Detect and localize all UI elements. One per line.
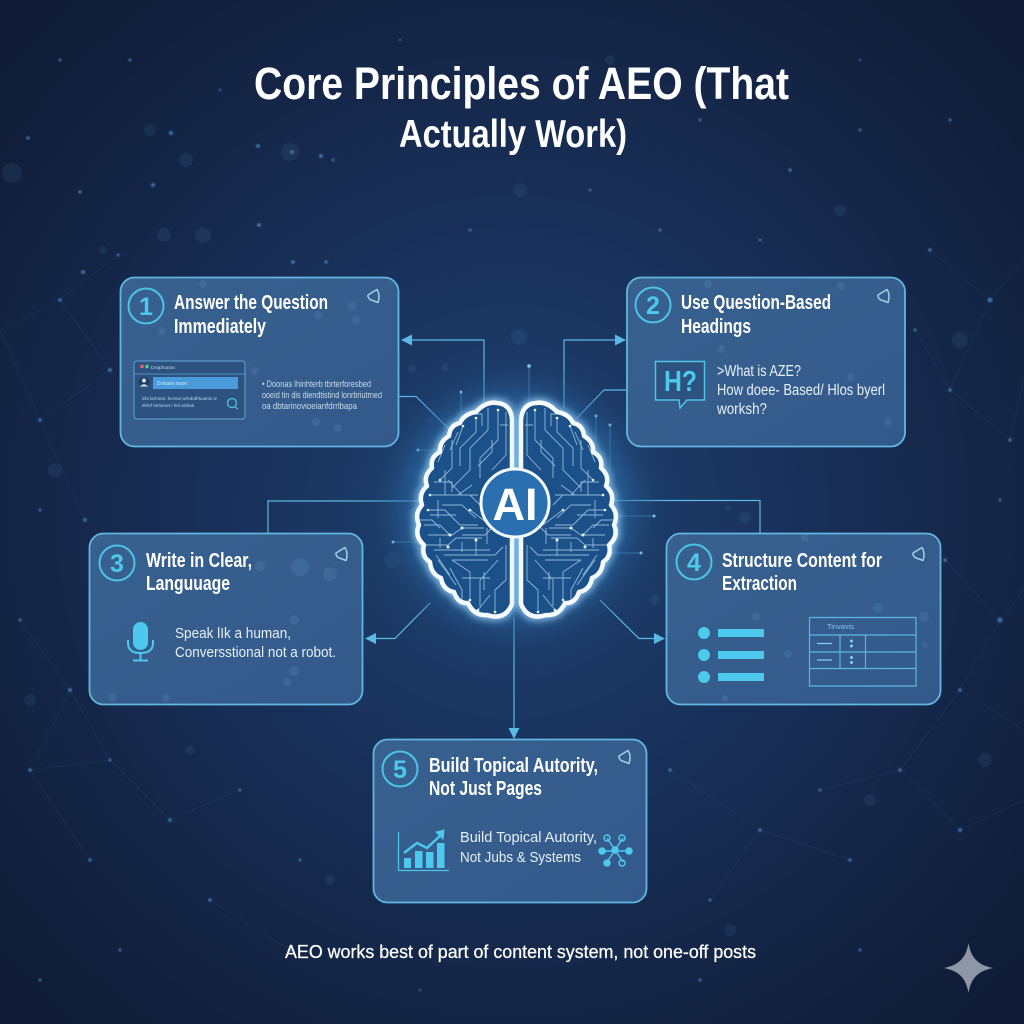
connector lines <box>268 340 760 738</box>
panel 5: topical authority <box>374 740 646 902</box>
left hemisphere <box>417 403 512 617</box>
browser window illustration <box>134 361 245 419</box>
icon: speaker 1 <box>368 290 379 302</box>
body text 5 <box>460 829 597 866</box>
heading 2 <box>681 292 831 338</box>
panel 3: clear language <box>90 534 362 704</box>
body text 2: >What is AZE? <box>717 363 801 380</box>
heading 4: Structure Content for <box>722 550 882 572</box>
icon: speaker 5 <box>619 750 630 764</box>
title: Actually Work) <box>399 113 627 156</box>
icon: H? speech bubble <box>656 362 704 408</box>
heading 4 <box>722 550 882 595</box>
heading 1: Immediately <box>174 316 267 338</box>
browser window illustration: Sht larhmet. berswt wrhdrdfrkuants tz <box>142 396 218 401</box>
number badge 2 <box>636 288 670 322</box>
body text 2: How doee- Based/ Hlos byerl <box>717 382 885 399</box>
body text 3 <box>175 625 336 661</box>
icon: growth chart <box>398 830 449 870</box>
body text 1 <box>262 379 382 412</box>
heading 5: Build Topical Autority, <box>429 755 598 777</box>
heading 5 <box>429 755 598 800</box>
AI badge: AI <box>492 479 538 530</box>
brain glow <box>366 358 666 658</box>
icon: table <box>810 618 916 686</box>
icon: speaker 3 <box>336 548 347 560</box>
icon: four-point star <box>944 943 993 993</box>
heading 1: Answer the Question <box>174 292 328 314</box>
number badge 1 <box>128 288 164 324</box>
panel 4: structure content <box>666 534 940 704</box>
icon: network <box>599 835 632 866</box>
heading 2: Headings <box>681 316 751 338</box>
card 2 bokeh <box>704 280 892 426</box>
number badge 3 <box>100 546 134 580</box>
heading 4: Extraction <box>722 573 797 595</box>
signal pins <box>392 364 656 554</box>
browser window illustration: Dsiphasis <box>151 365 176 370</box>
body text 2 <box>716 363 885 418</box>
body text 1: oa dbtarinovioeianfdrrlbapa <box>262 401 358 412</box>
card 1 bokeh <box>158 280 360 432</box>
circuit traces <box>420 408 508 613</box>
heading 5: Not Just Pages <box>429 778 542 800</box>
footer note: AEO works best of part of content system, not one-off posts <box>285 942 756 962</box>
icon: table: Tinvavis <box>827 624 855 631</box>
right hemisphere <box>521 403 616 617</box>
brain with AI badge <box>417 403 616 617</box>
number badge 5: 5 <box>393 756 407 784</box>
heading 2: Use Question-Based <box>681 292 831 314</box>
body text 3: Speak lIk a human, <box>175 625 291 642</box>
panel 2: question-based headings <box>627 278 905 446</box>
panel 1: answer the question <box>120 278 398 446</box>
icon: H? speech bubble: H? <box>664 366 697 398</box>
browser window illustration: Dvrisare maon <box>157 381 187 387</box>
icon: bullet list <box>698 627 764 683</box>
AI badge <box>481 469 549 537</box>
body text 2: worksh? <box>716 401 767 418</box>
browser window illustration: ekhrf lartomet t het artlrati <box>142 403 194 408</box>
heading 1 <box>174 292 328 338</box>
title: Core Principles of AEO (That <box>254 58 789 109</box>
card 3 bokeh <box>108 558 337 702</box>
heading 3 <box>146 550 252 595</box>
body text 5: Build Topical Autority, <box>460 829 597 846</box>
icon: microphone <box>128 622 153 660</box>
card 4 bokeh <box>722 534 929 701</box>
number badge 5 <box>382 752 418 786</box>
icon: speaker 2 <box>878 290 889 302</box>
body text 3: Conversstional not a robot. <box>175 644 336 661</box>
body text 1: • Doonas lhinhterb tbrterforesbed <box>262 379 371 390</box>
heading 3: Write in Clear, <box>146 550 252 572</box>
body text 1: ooeid tin dis diendtistind lonrbriutrned <box>262 390 382 401</box>
title <box>254 58 789 156</box>
body text 5: Not Jubs & Systems <box>460 849 581 866</box>
heading 3: Languuage <box>146 573 230 595</box>
icon: speaker 4 <box>913 548 924 560</box>
number badge 3: 3 <box>110 550 124 578</box>
number badge 4: 4 <box>687 549 701 577</box>
number badge 1: 1 <box>139 293 153 321</box>
number badge 2: 2 <box>646 292 660 320</box>
number badge 4 <box>676 544 712 580</box>
